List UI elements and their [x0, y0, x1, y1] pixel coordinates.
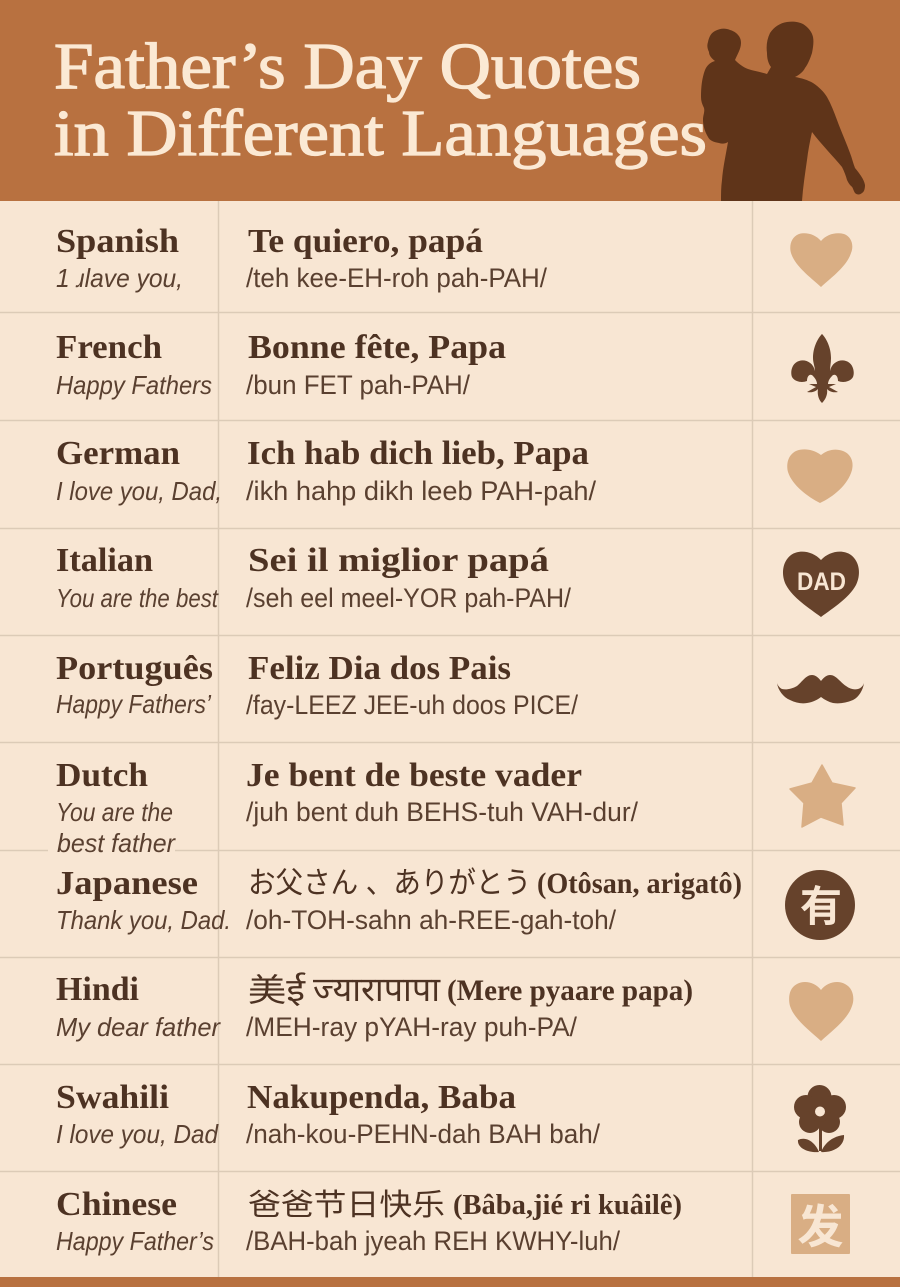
row: Chinese: (Bâba,jié ri kuâilê) [453, 1190, 682, 1221]
row: Spanish: Te quiero, papá [248, 223, 483, 260]
row: Português: Happy Fathers’ [56, 689, 212, 719]
row: Japanese [56, 865, 855, 940]
row: Hindi [56, 971, 853, 1042]
row: Swahili [56, 1079, 846, 1152]
row: Português: Feliz Dia dos Pais [248, 650, 511, 687]
row: Hindi: 美ई [248, 972, 307, 1008]
row: Italian: Italian [56, 542, 153, 579]
row: Chinese: 爸爸节日快乐 [248, 1189, 445, 1222]
row: Dutch: /juh bent duh BEHS-tuh VAH-dur/ [246, 797, 638, 827]
row: German: /ikh hahp dikh leeb PAH-pah/ [246, 476, 597, 506]
icon: DAD heart [783, 552, 859, 617]
icon: star [790, 765, 855, 827]
icon: flower [794, 1085, 846, 1152]
row: Hindi: ज्यारापापा [313, 971, 441, 1009]
row: Spanish: 1 ɹlave you, [56, 263, 183, 293]
row: Chinese: /BAH-bah jyeah REH KWHY-luh/ [246, 1226, 620, 1256]
row: Português: /fay-LEEZ JEE-uh doos PICE/ [246, 690, 578, 720]
icon: DAD heart: DAD [797, 568, 846, 596]
row: Swahili: /nah-kou-PEHN-dah BAH bah/ [246, 1119, 600, 1149]
title [54, 30, 707, 170]
row: Dutch [56, 757, 855, 858]
row: Hindi: (Mere pyaare papa) [447, 974, 693, 1007]
row: Japanese: Japanese [56, 865, 198, 902]
header banner [0, 0, 900, 201]
row: Português [56, 650, 864, 720]
icon: circle with kanji [785, 870, 855, 940]
row: Japanese: お父さん 、ありがとう [248, 867, 531, 900]
row: German [56, 435, 853, 506]
row: German: Ich hab dich lieb, Papa [247, 435, 589, 472]
row: Italian: /seh eel meel-YOR pah-PAH/ [246, 583, 571, 613]
row: Spanish [56, 223, 852, 293]
row: Dutch: Je bent de beste vader [246, 757, 582, 794]
row: Spanish: Spanish [56, 223, 179, 260]
row: German: German [56, 435, 180, 472]
row: Japanese: /oh-TOH-sahn ah-REE-gah-toh/ [246, 905, 616, 935]
row: German: I love you, Dad, [56, 476, 222, 506]
row: Dutch: You are the [56, 797, 173, 827]
icon: fleur-de-lis [791, 334, 854, 403]
row: Swahili: Swahili [56, 1079, 169, 1116]
row: Dutch: best father [57, 828, 176, 858]
footer bar [0, 1277, 900, 1287]
row: Italian [56, 542, 859, 617]
row: Português: Português [56, 650, 213, 687]
row: French: French [56, 329, 162, 366]
icon: father carrying child silhouette [701, 22, 865, 201]
row: Hindi: Hindi [56, 971, 139, 1008]
row: Swahili: I love you, Dad [56, 1119, 219, 1149]
row: French: Happy Fathers [56, 370, 212, 400]
row: French [56, 329, 854, 403]
title: Father’s Day Quotes [54, 30, 641, 103]
icon: mustache [777, 675, 864, 703]
icon: rounded heart [787, 449, 853, 503]
row: Chinese [56, 1186, 850, 1257]
row: Japanese: Thank you, Dad. [56, 905, 231, 935]
icon: circle with kanji: 有 [800, 873, 842, 934]
row: Chinese: Chinese [56, 1186, 177, 1223]
icon: square with character: 发 [798, 1191, 844, 1257]
icon: heart [790, 233, 852, 287]
row: Hindi: /MEH-ray pYAH-ray puh-PA/ [246, 1012, 577, 1042]
icon: heart [789, 982, 853, 1041]
row: Spanish: /teh kee-EH-roh pah-PAH/ [246, 263, 547, 293]
row: Italian: You are the best [56, 583, 220, 613]
row: Hindi: My dear father [56, 1012, 221, 1042]
row: French: Bonne fête, Papa [248, 329, 506, 366]
row: Japanese: (Otôsan, arigatô) [537, 867, 742, 900]
row: French: /bun FET pah-PAH/ [246, 370, 470, 400]
row: Italian: Sei il miglior papá [248, 542, 549, 579]
row: Swahili: Nakupenda, Baba [247, 1079, 516, 1116]
row: Chinese: Happy Father’s [56, 1226, 214, 1256]
title: in Different Languages [54, 97, 707, 170]
row: Dutch: Dutch [56, 757, 148, 794]
